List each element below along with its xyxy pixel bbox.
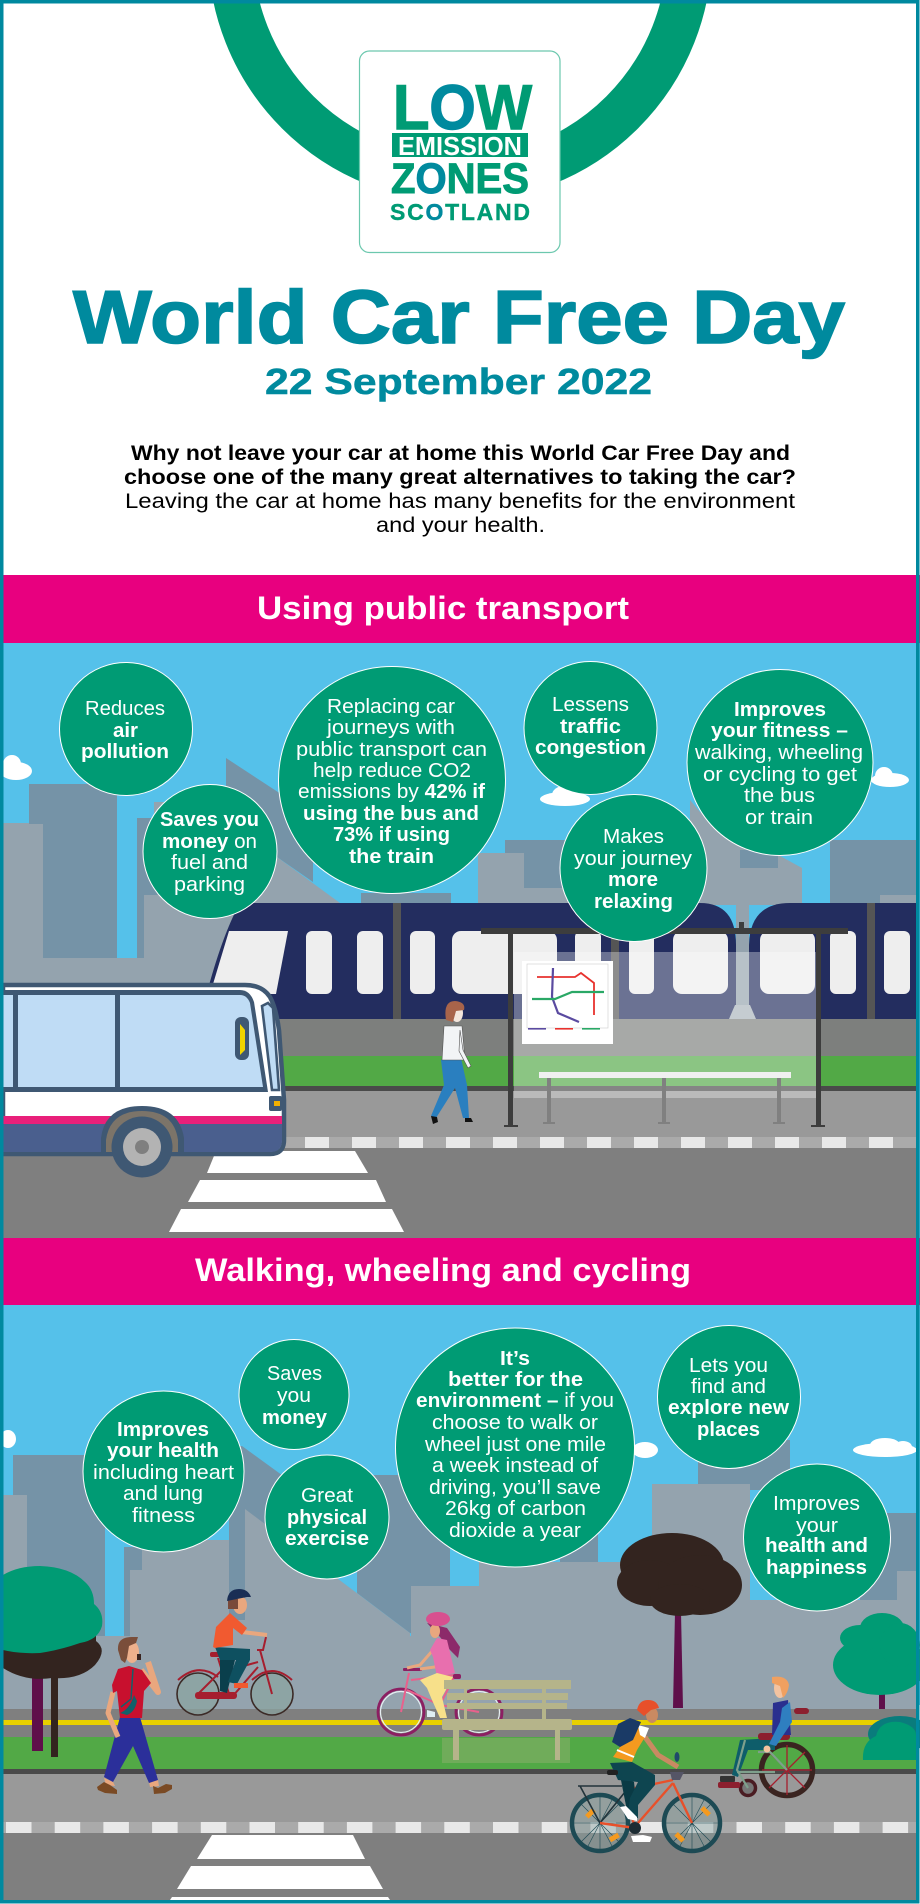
bubble: improves your health: your health [107,1440,219,1462]
heading band: using public transport: Using public transport [257,590,629,626]
bubble: improves your fitness: your fitness – [711,720,848,742]
bubble: more relaxing: your journey [574,848,692,870]
bubble: better for the environment: dioxide a year [449,1520,581,1542]
bubble: health and happiness: Improves [773,1493,860,1515]
bubble: reducing CO2 emissions: help reduce CO2 [313,760,471,782]
train [205,903,916,1019]
bubble: lessens traffic congestion: traffic [560,716,621,738]
intro text: Leaving the car at home has many benefits for the environment [125,490,795,513]
bus shelter [481,922,848,1127]
date: 22 September 2022 [265,361,652,402]
bubble: saves you money [143,784,277,918]
logo ring [230,0,690,180]
cyclist with backpack [572,1700,720,1851]
tree: left [3,1566,102,1757]
bubble: reducing CO2 emissions: journeys with [326,717,455,739]
bubble: lessens traffic congestion [524,662,657,794]
bubble: explore new places [658,1326,800,1468]
heading band: using public transport [0,575,920,643]
bubble: great physical exercise: Great [301,1485,353,1507]
bubble: improves your health [83,1391,244,1552]
logo: EMISSION [398,131,522,161]
bubble: explore new places: explore new [668,1397,789,1419]
intro text: choose one of the many great alternatives to taking the car? [124,466,796,489]
bubble: better for the environment [396,1328,634,1567]
bubble: great physical exercise [265,1455,389,1579]
bubble: more relaxing: more [608,869,658,891]
intro text [124,442,796,537]
bubble: explore new places: find and [691,1376,766,1398]
bubble: lessens traffic congestion: congestion [535,737,646,759]
bubble: saves you money: parking [174,874,245,896]
bus [3,985,284,1178]
bubble: better for the environment: better for the [448,1369,583,1391]
bubble: health and happiness: health and [765,1535,868,1557]
bush [863,1716,920,1760]
bubble: reduces air pollution: pollution [81,741,169,763]
bubble: saves you money: Saves [267,1363,322,1385]
bubble: better for the environment: choose to walk or [432,1412,598,1434]
title: World Car Free Day [73,275,845,359]
bubble: reducing CO2 emissions: 73% if using [333,824,450,846]
bubble: improves your fitness: the bus [744,785,815,807]
logo: SCOTLAND [390,199,530,225]
bubble: reducing CO2 emissions: emissions by 42% if [298,781,485,803]
bubble: lessens traffic congestion: Lessens [552,694,629,716]
bubble: improves your health: fitness [132,1505,195,1527]
bubble: better for the environment: wheel just one mile [424,1434,606,1456]
bubble: improves your fitness: or cycling to get [703,764,857,786]
ground: path, grass, pavement, road [3,1709,916,1900]
logo: LOW [393,73,533,143]
bubble: improves your health: Improves [117,1419,209,1441]
pedestrian on phone [97,1637,172,1794]
bubble: reducing CO2 emissions: using the bus and [303,803,479,825]
bubble: health and happiness: your [796,1515,838,1537]
bubble: more relaxing [560,794,707,942]
bubble: saves you money: Saves you [160,809,259,831]
bubble: more relaxing: Makes [603,826,664,848]
bubble: more relaxing: relaxing [594,891,673,913]
wheelchair user [718,1677,812,1796]
pedestrian crossing [169,1151,404,1232]
pedestrian crossing 2 [170,1835,390,1900]
pavement and road [3,1019,916,1238]
bubble: better for the environment: a week instead of [432,1455,598,1477]
bubble: reducing CO2 emissions: Replacing car [327,696,455,718]
bubble: improves your fitness: walking, wheeling [694,742,863,764]
tree: middle [617,1533,742,1708]
bubble: saves you money: fuel and [171,852,248,874]
bubble: better for the environment: It’s [500,1348,530,1370]
bubble: improves your fitness [687,670,873,856]
bubble: reducing CO2 emissions: the train [349,846,434,868]
bubble: reduces air pollution: air [113,720,138,742]
park bench [442,1680,572,1763]
intro text: and your health. [376,514,545,537]
bubble: reduces air pollution: Reduces [85,698,165,720]
bubble: better for the environment: driving, you’ll save [429,1477,601,1499]
bubble: saves you money: money on [162,831,257,853]
route map poster [522,961,613,1044]
tree: right [833,1613,920,1726]
bubble: great physical exercise: exercise [285,1528,369,1550]
bubble: reducing CO2 emissions: public transport can [296,739,487,761]
scene: walking and cycling background [0,1305,920,1711]
bubble: improves your health: and lung [123,1483,203,1505]
bubble: improves your fitness: Improves [734,699,826,721]
bubble: better for the environment: 26kg of carbon [445,1498,586,1520]
intro text: Why not leave your car at home this World Car Free Day and [131,442,790,465]
person walking [431,1001,473,1124]
bubble: health and happiness [744,1464,890,1611]
bubble: health and happiness: happiness [766,1557,867,1579]
bubble: great physical exercise: physical [287,1507,367,1529]
bubble: saves you money: money [262,1407,328,1429]
bubble: explore new places: Lets you [689,1355,768,1377]
scene: public transport background [0,643,920,1238]
cyclist in orange shirt [177,1589,293,1715]
bubble: reducing CO2 emissions [278,666,506,894]
logo: ZONES [391,155,529,203]
heading band: walking, wheeling and cycling [0,1238,920,1305]
bubble: saves you money [239,1340,349,1450]
bubble: reduces air pollution [60,662,192,796]
bubble: improves your health: including heart [93,1462,234,1484]
bubble: improves your fitness: or train [745,807,813,829]
logo [360,51,560,252]
bubble: saves you money: you [277,1385,311,1407]
bubble: better for the environment: environment – if you [416,1390,614,1412]
heading band: walking, wheeling and cycling: Walking, wheeling and cycling [195,1252,691,1288]
cyclist in pink [378,1612,502,1735]
bubble: explore new places: places [697,1419,760,1441]
